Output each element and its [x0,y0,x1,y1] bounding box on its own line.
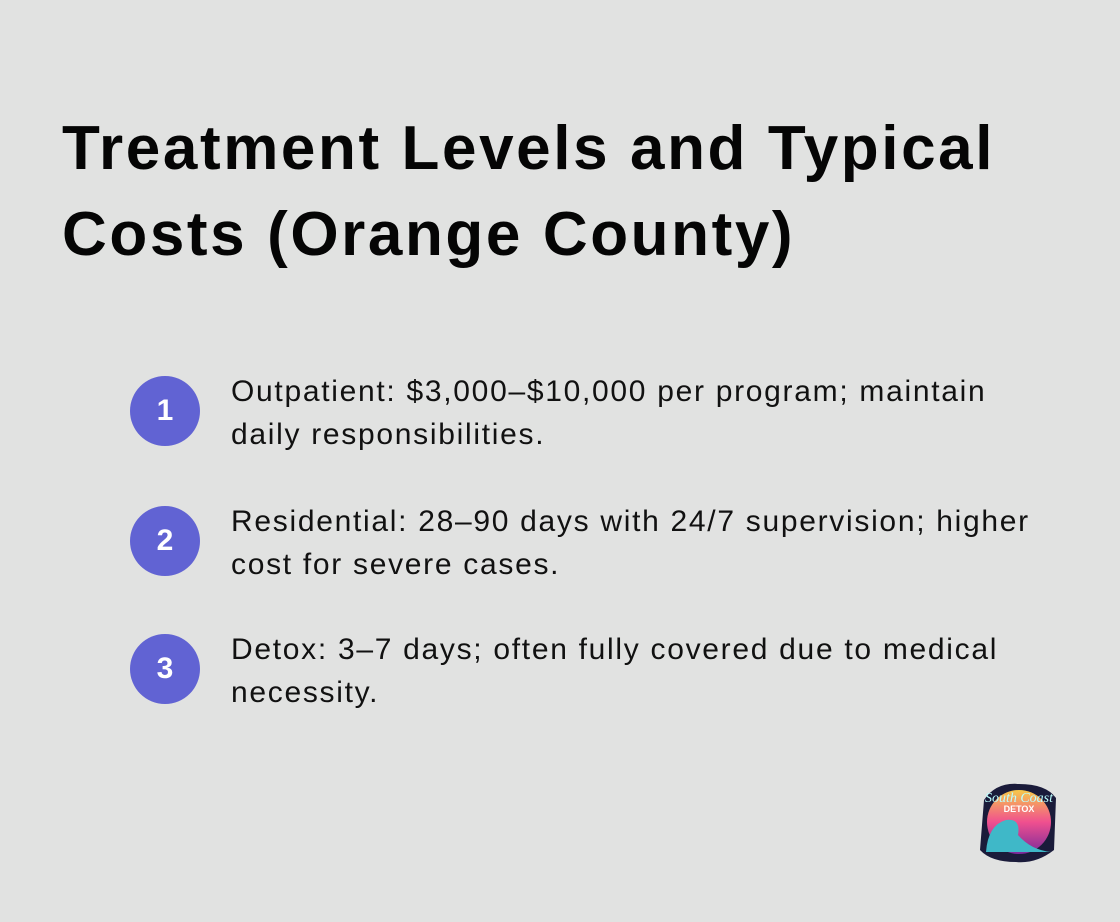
number badge 1 [130,376,200,446]
text 3: Detox: 3–7 days; often fully covered due to medical [231,633,998,666]
text 2: Residential: 28–90 days with 24/7 supervision; higher [231,505,1030,538]
text 3: necessity. [231,676,379,709]
logo [980,784,1056,862]
number badge 2 [130,506,200,576]
text 1: Outpatient: $3,000–$10,000 per program; maintain [231,375,986,408]
number badge 3 [130,634,200,704]
number badge 3: 3 [157,652,173,685]
logo: DETOX [1004,804,1034,814]
text 2 [231,505,1030,581]
item 2: residential [130,505,1030,581]
text 1: daily responsibilities. [231,418,545,451]
title: Treatment Levels and Typical [62,114,995,183]
number badge 1: 1 [157,394,173,427]
text 1 [231,375,986,451]
title [62,114,995,269]
item 3: detox [130,633,998,709]
item 1: outpatient [130,375,986,451]
number badge 2: 2 [157,524,173,557]
text 3 [231,633,998,709]
title: Costs (Orange County) [62,200,795,269]
logo: South Coast [985,791,1054,806]
text 2: cost for severe cases. [231,548,560,581]
